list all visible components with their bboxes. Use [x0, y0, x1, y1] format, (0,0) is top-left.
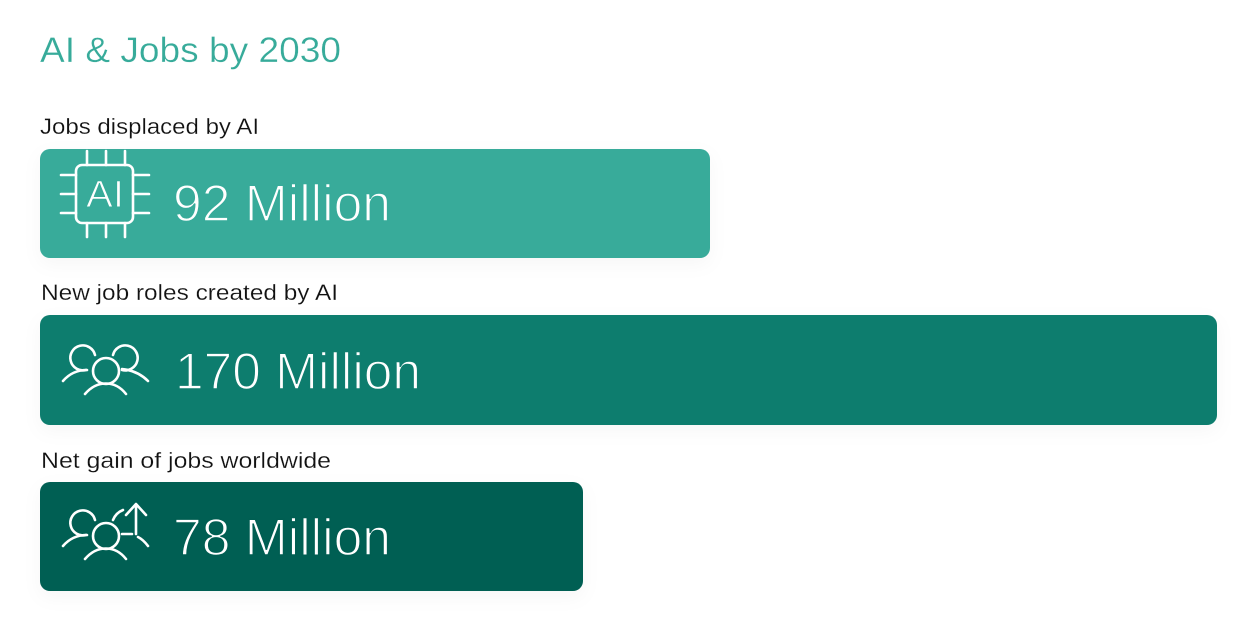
- icon: AI chip: AI: [86, 174, 124, 216]
- text block: new job roles label: New job roles created by AI: [41, 280, 338, 305]
- text block: net gain label: Net gain of jobs worldwide: [41, 448, 331, 473]
- text block: jobs displaced label: Jobs displaced by AI: [40, 114, 259, 139]
- panel: net gain bar: [40, 482, 583, 591]
- title: AI & Jobs by 2030: [40, 31, 341, 70]
- text: 78 Million: 78 Million: [173, 509, 391, 567]
- icon: three people: [63, 345, 148, 394]
- text: 92 Million: 92 Million: [173, 175, 391, 233]
- text: 170 Million: 170 Million: [175, 343, 421, 401]
- icon: AI chip: [61, 151, 149, 237]
- panel: jobs displaced bar: [40, 149, 710, 258]
- icon: people with up arrow: [63, 504, 148, 559]
- panel: new job roles bar: [40, 315, 1217, 425]
